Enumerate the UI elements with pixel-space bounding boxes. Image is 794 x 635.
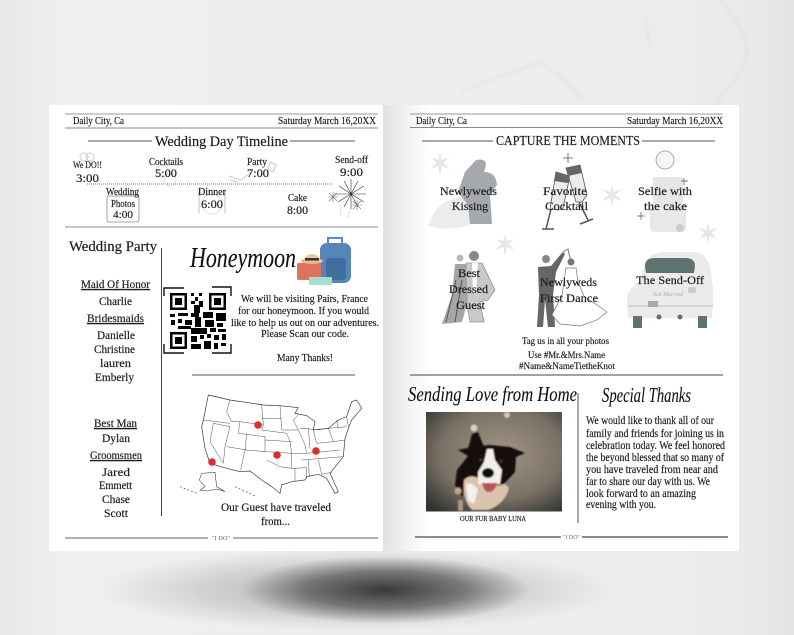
wedding party list: lauren	[100, 358, 131, 370]
header left page: Saturday March 16,20XX	[278, 115, 376, 127]
honeymoon heading: Honeymoon	[189, 243, 296, 274]
left page	[49, 105, 739, 551]
wedding party list: Wedding Party	[69, 239, 157, 255]
icon: kissing couple	[428, 160, 497, 229]
icon: getaway car: Just Married	[652, 292, 684, 298]
Send-off	[335, 155, 369, 179]
sparkles	[430, 152, 718, 256]
social tags: #Name&NameTietheKnot	[519, 362, 615, 372]
wedding party list: Christine	[94, 344, 135, 356]
wedding party list	[69, 239, 157, 520]
prompt: selfie with the cake	[638, 184, 692, 213]
header right page: Daily City, Ca	[416, 115, 467, 127]
wedding party list: Best Man	[94, 418, 137, 430]
Dinner	[198, 187, 227, 214]
QR code	[164, 287, 231, 353]
Dinner: 6:00	[201, 199, 223, 211]
Cocktails: 5:00	[155, 168, 177, 180]
icon: party horn	[229, 162, 276, 182]
header left page: Daily City, Ca	[73, 115, 124, 127]
Party: 7:00	[247, 168, 269, 180]
social tags: Use #Mr.&Mrs.Name	[528, 351, 605, 361]
prompt: best dressed guest	[449, 266, 488, 312]
icon: champagne glasses	[542, 153, 593, 229]
timeline	[73, 153, 369, 222]
ground shadow	[95, 548, 615, 632]
right page	[408, 114, 728, 541]
icon: fireworks	[328, 179, 366, 218]
special thanks text	[586, 415, 725, 511]
photo caption: OUR FUR BABY LUNA	[460, 514, 526, 523]
header right page	[410, 114, 723, 128]
honeymoon text: We will be visiting Pairs, France	[241, 293, 368, 305]
heading: special thanks: Special Thanks	[602, 383, 691, 407]
prompt: favorite cocktail	[543, 184, 589, 213]
prompt: the send-off: The Send-Off	[636, 273, 704, 287]
prompt: selfie with the cake: the cake	[644, 199, 687, 213]
icon: luggage	[297, 238, 351, 285]
social tags: Tag us in all your photos	[522, 337, 609, 347]
prompt: favorite cocktail: Cocktail	[545, 199, 589, 213]
prompt: newlyweds kissing: Kissing	[452, 199, 488, 213]
wedding party list: Bridesmaids	[87, 313, 145, 325]
honeymoon text: for our honeymoon. If you would	[238, 305, 369, 317]
honeymoon text	[231, 293, 379, 364]
special thanks text: family and friends for joining us in	[586, 428, 724, 440]
Wedding Photos	[106, 187, 139, 222]
Wedding Photos: Photos	[111, 199, 135, 210]
Cake	[287, 193, 308, 217]
social tags	[519, 337, 615, 372]
wedding party list: Dylan	[102, 433, 130, 445]
wedding party list: Maid Of Honor	[81, 279, 150, 291]
timeline heading: Wedding Day Timeline	[155, 134, 288, 150]
honeymoon text: Please Scan our code.	[261, 328, 349, 340]
map of USA with pins	[180, 395, 362, 497]
We Do	[73, 161, 102, 185]
honeymoon text: like to help us out on our adventures.	[231, 317, 379, 329]
wedding party list: Jared	[102, 467, 130, 479]
wedding party list: Charlie	[99, 296, 132, 308]
prompt: selfie with the cake: Selfie with	[638, 184, 692, 198]
Send-off: 9:00	[340, 167, 363, 179]
wedding party list: Emberly	[95, 372, 134, 384]
dog photo	[426, 412, 562, 512]
Cocktails: Cocktails	[149, 157, 183, 168]
Wedding Photos: 4:00	[113, 209, 134, 221]
footer left page: "I DO"	[212, 535, 230, 542]
Party: Party	[247, 157, 267, 168]
prompt: newlyweds first dance: Newlyweds	[540, 275, 597, 289]
honeymoon text: Many Thanks!	[277, 352, 333, 364]
wedding party list: Scott	[104, 508, 129, 520]
Cake: Cake	[288, 193, 308, 204]
prompt: newlyweds first dance	[540, 275, 598, 305]
prompt: best dressed guest: Dressed	[449, 282, 488, 296]
special thanks text: far to share our day with us. We	[586, 476, 710, 488]
Dinner: Dinner	[198, 187, 227, 198]
prompt: best dressed guest: Guest	[456, 298, 486, 312]
icon: best dressed couple	[442, 251, 495, 324]
Cake: 8:00	[287, 205, 308, 217]
prompt: best dressed guest: Best	[458, 266, 481, 280]
We Do: We DO!!	[73, 161, 102, 171]
Cocktails	[149, 157, 183, 180]
prompt: newlyweds first dance: First Dance	[540, 291, 598, 305]
wedding party list: Chase	[102, 494, 130, 506]
map caption: Our Guest have traveled	[221, 500, 331, 514]
Wedding Photos: Wedding	[106, 187, 139, 198]
wedding party list: Groomsmen	[90, 450, 142, 462]
special thanks text: We would like to thank all of our	[586, 415, 714, 427]
Send-off: Send-off	[335, 155, 369, 166]
map caption	[221, 500, 331, 528]
prompt: newlyweds kissing: Newlyweds	[440, 184, 497, 198]
icon: rings	[80, 153, 94, 161]
icon: first dance couple	[537, 249, 607, 327]
prompt: favorite cocktail: Favorite	[543, 184, 587, 198]
header right page: Saturday March 16,20XX	[627, 115, 723, 127]
wedding party list: Danielle	[97, 330, 135, 342]
footer right page: "I DO"	[563, 534, 580, 541]
map caption: from...	[261, 514, 290, 528]
special thanks text: you have traveled from near and	[586, 464, 718, 476]
prompt: newlyweds kissing	[440, 184, 497, 213]
special thanks text: the beyond blessed that so many of	[586, 452, 724, 464]
header left page	[65, 114, 378, 128]
We Do: 3:00	[76, 173, 99, 185]
Party	[247, 157, 269, 180]
special thanks text: evening with you.	[586, 499, 656, 511]
special thanks text: celebration today. We feel honored	[586, 440, 725, 452]
Alaska and Hawaii	[199, 472, 225, 492]
icon: wedding cake	[637, 151, 688, 232]
heading: sending love: Sending Love from Home	[408, 382, 577, 406]
icon: getaway car	[627, 252, 713, 328]
special thanks text: look forward to an amazing	[586, 488, 696, 500]
wedding party list: Emmett	[99, 480, 133, 492]
icon: cocktail glasses	[156, 165, 176, 186]
capture heading: CAPTURE THE MOMENTS	[496, 134, 640, 149]
